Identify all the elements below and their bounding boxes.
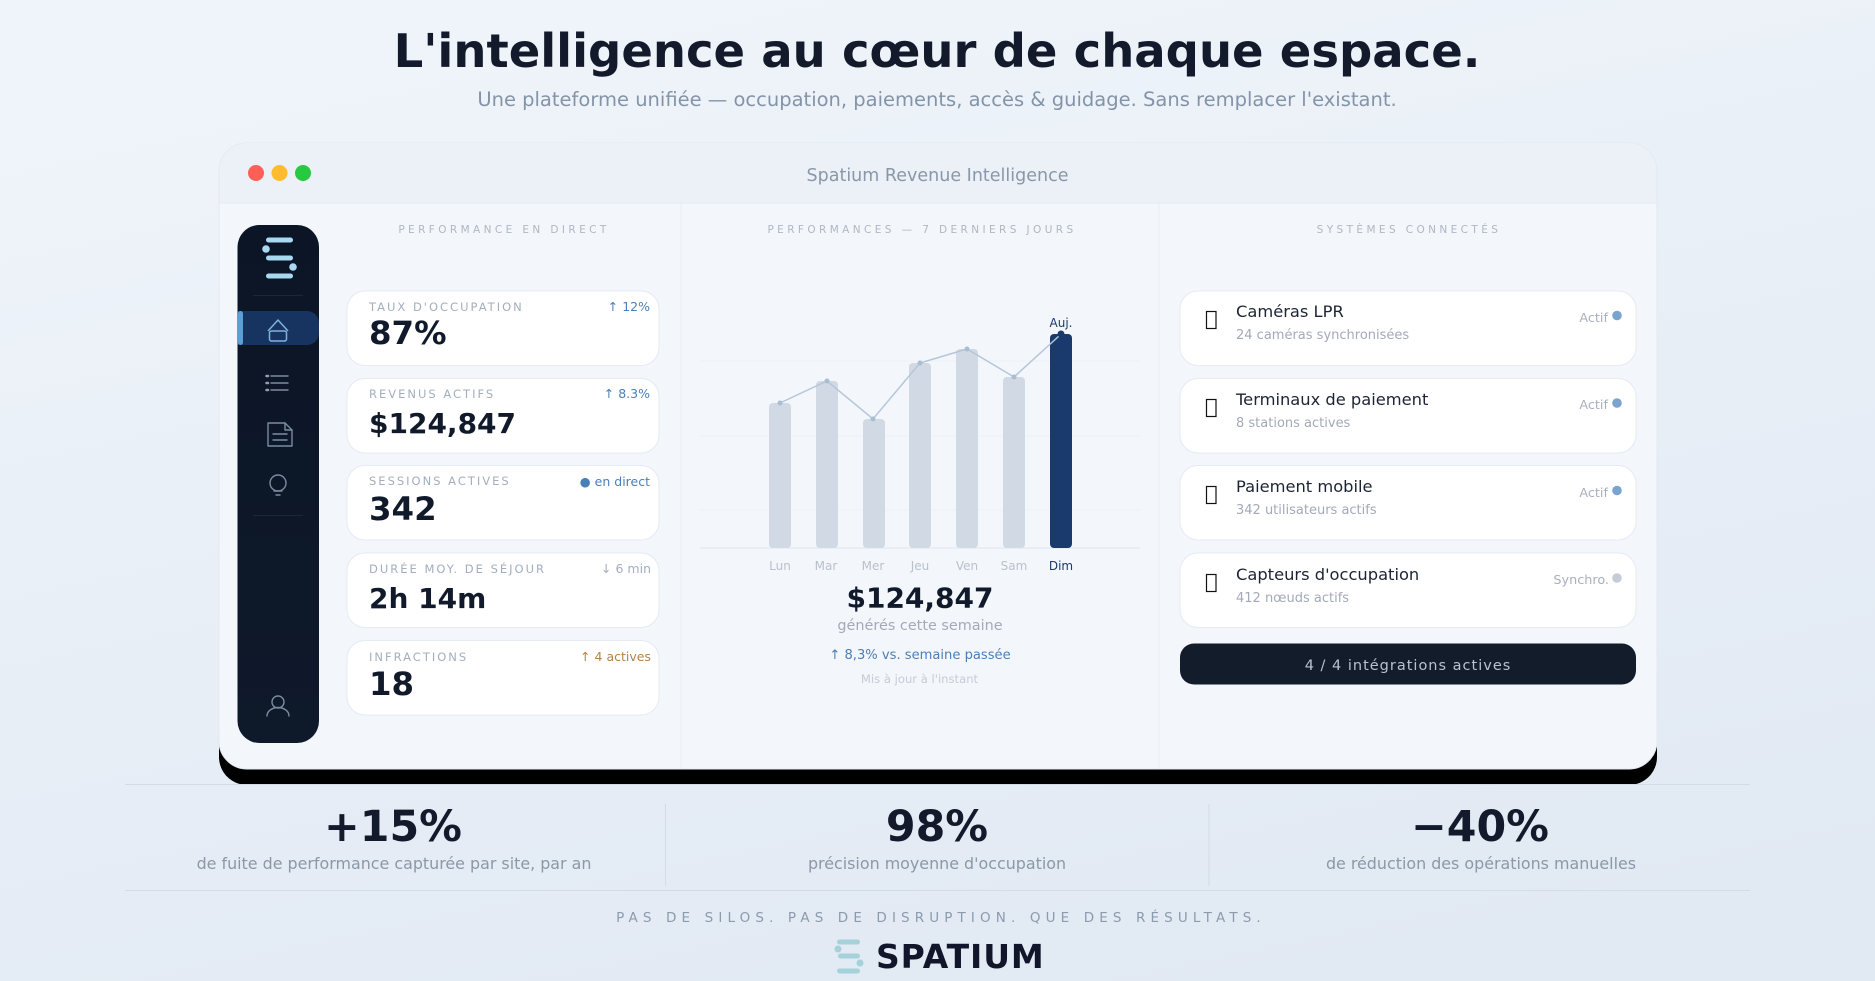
bar chart: Mar: [815, 559, 837, 573]
stat: reduction: −40%: [1411, 802, 1549, 852]
system: mobile: 342 utilisateurs actifs: [1236, 503, 1377, 518]
stat: accuracy: 98%: [886, 802, 988, 852]
system: cameras: [1180, 291, 1636, 366]
system: terminals: [1180, 378, 1636, 453]
heading: PERFORMANCES — 7 DERNIERS JOURS: [767, 224, 1077, 236]
kpi: occupation: TAUX D'OCCUPATION: [368, 300, 524, 314]
tagline: PAS DE SILOS. PAS DE DISRUPTION. QUE DES RÉSULTATS.: [616, 909, 1266, 926]
kpi: violations: INFRACTIONS: [369, 650, 468, 664]
kpi: occupation: [347, 291, 659, 366]
heading: PERFORMANCE EN DIRECT: [398, 224, 610, 236]
stat: reduction: de réduction des opérations manuelles: [1326, 854, 1636, 873]
kpi: violations: 18: [369, 665, 414, 703]
window title bar: [219, 143, 1657, 203]
system: sensors: [1180, 553, 1636, 628]
bar chart: Dim: [1049, 559, 1073, 573]
icon: user: [267, 696, 289, 716]
kpi: revenue: [347, 378, 659, 453]
nav item: active home: [238, 311, 319, 345]
system: sensors: 412 nœuds actifs: [1236, 591, 1349, 606]
stat: leakage captured: +15%: [324, 802, 462, 852]
bar chart: Mer: [862, 559, 884, 573]
kpi: sessions: SESSIONS ACTIVES: [369, 474, 511, 488]
system: terminals: Terminaux de paiement: [1235, 390, 1428, 409]
kpi: revenue: $124,847: [369, 407, 516, 440]
window title bar: Spatium Revenue Intelligence: [807, 166, 1068, 186]
bar chart: Auj.: [1050, 316, 1072, 330]
system: cameras: 24 caméras synchronisées: [1236, 328, 1409, 343]
status bar: 4 / 4 intégrations actives: [1305, 658, 1511, 674]
panel: live performance: [347, 224, 659, 715]
kpi: violations: [347, 640, 659, 715]
logo: SPATIUM: [876, 937, 1045, 976]
icon: bulb: [270, 475, 286, 495]
kpi: sessions: ● en direct: [580, 474, 650, 489]
kpi: revenue: REVENUS ACTIFS: [369, 387, 495, 401]
icon: document: [268, 423, 292, 446]
kpi: duration: ↓ 6 min: [601, 561, 651, 576]
kpi: revenue: ↑ 8.3%: [604, 386, 650, 401]
dashboard window: [219, 143, 1657, 785]
kpi: sessions: [347, 466, 659, 540]
system: terminals: 8 stations actives: [1236, 416, 1351, 431]
system: sensors: Capteurs d'occupation: [1236, 565, 1419, 584]
kpi: duration: 2h 14m: [369, 582, 486, 615]
bar chart: Sam: [1001, 559, 1027, 573]
weekly total: $124,847: [846, 582, 994, 614]
system: mobile: [1180, 466, 1636, 540]
system: sensors: Synchro.: [1553, 573, 1609, 588]
status bar: [1180, 644, 1636, 684]
sidebar: [238, 225, 319, 743]
bar chart: [700, 316, 1140, 573]
system: cameras: Actif: [1579, 311, 1608, 326]
weekly total: Mis à jour à l'instant: [861, 672, 979, 686]
system: cameras: Caméras LPR: [1236, 302, 1344, 321]
stat: leakage captured: de fuite de performance capturée par site, par an: [197, 854, 591, 873]
stat: reduction: [1326, 802, 1636, 873]
heading: SYSTÈMES CONNECTÉS: [1317, 223, 1501, 236]
bar chart: Jeu: [910, 559, 929, 573]
kpi: occupation: ↑ 12%: [608, 299, 650, 314]
bar chart: Lun: [769, 559, 791, 573]
weekly total: générés cette semaine: [837, 618, 1003, 634]
kpi: duration: DURÉE MOY. DE SÉJOUR: [369, 561, 546, 576]
weekly total: [829, 582, 1011, 686]
kpi: occupation: 87%: [369, 314, 447, 352]
system: mobile: Paiement mobile: [1236, 477, 1373, 496]
stat: accuracy: précision moyenne d'occupation: [808, 854, 1066, 873]
stat: leakage captured: [197, 802, 591, 873]
panel: connected systems: [1180, 223, 1636, 684]
bar chart: Ven: [956, 559, 978, 573]
kpi: duration: [347, 553, 659, 628]
panel: 7 day performance: [700, 224, 1140, 686]
system: mobile: Actif: [1579, 486, 1608, 501]
kpi: sessions: 342: [369, 490, 437, 528]
kpi: violations: ↑ 4 actives: [580, 649, 651, 664]
icon: spatium mark: [262, 238, 297, 278]
weekly total: ↑ 8,3% vs. semaine passée: [829, 648, 1011, 663]
subtitle: Une plateforme unifiée — occupation, paiements, accès & guidage. Sans remplacer l'existant.: [477, 88, 1397, 111]
system: terminals: Actif: [1579, 398, 1608, 413]
stat: accuracy: [808, 802, 1066, 873]
icon: list: [266, 376, 288, 390]
title: L'intelligence au cœur de chaque espace.: [394, 24, 1480, 78]
